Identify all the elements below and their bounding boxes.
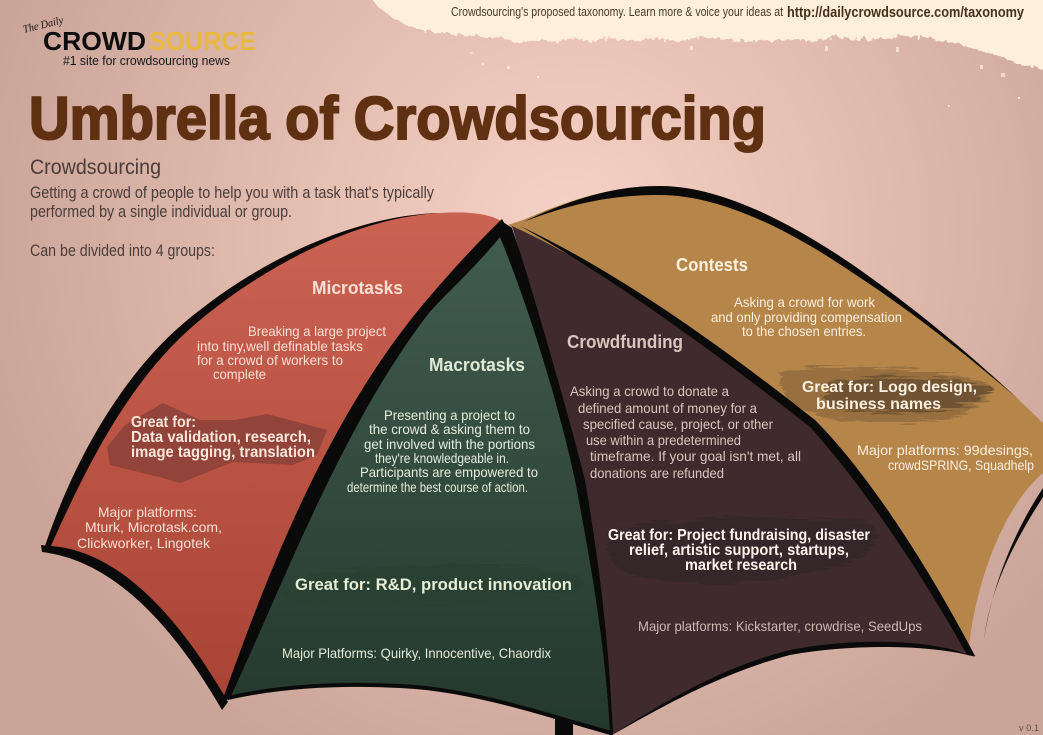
microtasks platforms [77, 504, 222, 551]
umbrella [41, 186, 1043, 735]
intro heading: Crowdsourcing [30, 156, 161, 179]
crowdfunding great-for callout: relief, artistic support, startups, [629, 542, 849, 559]
panel: macrotasks [228, 222, 613, 735]
macrotasks heading: Macrotasks [429, 354, 525, 375]
macrotasks description: Participants are empowered to [360, 464, 538, 480]
top cream banner [365, 0, 1043, 106]
outer right rib stroke [984, 488, 1043, 640]
macrotasks great-for callout [282, 565, 585, 605]
microtasks great-for callout [107, 403, 327, 483]
macrotasks great-for callout: Great for: R&D, product innovation [295, 575, 572, 594]
crowdfunding description: specified cause, project, or other [583, 416, 773, 432]
macrotasks description [347, 407, 538, 495]
logo [22, 14, 256, 68]
version label: v 0.1 [1019, 723, 1039, 733]
microtasks great-for callout: Data validation, research, [131, 429, 311, 446]
panel: contests [508, 186, 1043, 655]
microtasks platforms: Major platforms: [98, 504, 197, 520]
macrotasks description: get involved with the portions [364, 436, 535, 452]
panel: crowdfunding [512, 226, 976, 735]
microtasks platforms: Mturk, Microtask.com, [85, 519, 222, 535]
logo: SOURCE [149, 26, 256, 56]
contests heading: Contests [676, 254, 748, 275]
title: Umbrella of Crowdsourcing [29, 85, 766, 152]
microtasks platforms: Clickworker, Lingotek [77, 535, 211, 551]
contests description: Asking a crowd for work [734, 294, 876, 310]
microtasks heading: Microtasks [312, 277, 403, 298]
crowdfunding heading: Crowdfunding [567, 331, 683, 352]
contests great-for callout [781, 367, 995, 423]
microtasks description: complete [213, 366, 266, 382]
crowdfunding great-for callout [607, 517, 878, 585]
intro body: performed by a single individual or group. [30, 203, 292, 221]
crowdfunding description: donations are refunded [590, 465, 724, 481]
crowdfunding great-for callout: market research [685, 557, 797, 574]
microtasks great-for callout: image tagging, translation [131, 444, 315, 461]
contests great-for callout: Great for: Logo design, [802, 379, 977, 396]
handle stub [555, 716, 573, 735]
contests description: and only providing compensation [711, 309, 902, 325]
crowdfunding description [570, 383, 801, 481]
microtasks description: Breaking a large project [248, 323, 386, 339]
macrotasks description: they're knowledgeable in. [375, 450, 509, 466]
contests platforms [857, 442, 1034, 473]
crowdfunding great-for callout: Great for: Project fundraising, disaster [608, 527, 870, 544]
intro body: Getting a crowd of people to help you with a task that's typically [30, 184, 435, 202]
intro body [30, 184, 435, 260]
crowdfunding description: defined amount of money for a [578, 400, 757, 416]
contests description [711, 294, 902, 339]
panel: microtasks [41, 212, 507, 710]
contests great-for callout: business names [816, 396, 941, 413]
microtasks description: for a crowd of workers to [197, 352, 343, 368]
logo: The Daily [22, 14, 65, 36]
banner text [451, 4, 1025, 21]
macrotasks platforms: Major Platforms: Quirky, Innocentive, Chaordix [282, 645, 551, 661]
intro text [30, 156, 435, 260]
crowdfunding description: use within a predetermined [586, 432, 741, 448]
macrotasks description: the crowd & asking them to [369, 421, 530, 437]
intro body: Can be divided into 4 groups: [30, 242, 215, 260]
macrotasks description: Presenting a project to [384, 407, 515, 423]
microtasks description: into tiny,well definable tasks [197, 338, 363, 354]
contests description: to the chosen entries. [742, 323, 866, 339]
microtasks great-for callout: Great for: [131, 414, 196, 431]
logo: #1 site for crowdsourcing news [63, 54, 230, 68]
banner text: Crowdsourcing's proposed taxonomy. Learn more & voice your ideas at [451, 5, 783, 19]
microtasks description [197, 323, 386, 382]
crowdfunding description: timeframe. If your goal isn't met, all [590, 448, 801, 464]
crowdfunding description: Asking a crowd to donate a [570, 383, 729, 399]
crowdfunding platforms: Major platforms: Kickstarter, crowdrise, SeedUps [638, 618, 922, 634]
logo: CROWD [43, 26, 146, 56]
contests platforms: Major platforms: 99desings, [857, 442, 1033, 458]
macrotasks description: determine the best course of action. [347, 479, 528, 495]
